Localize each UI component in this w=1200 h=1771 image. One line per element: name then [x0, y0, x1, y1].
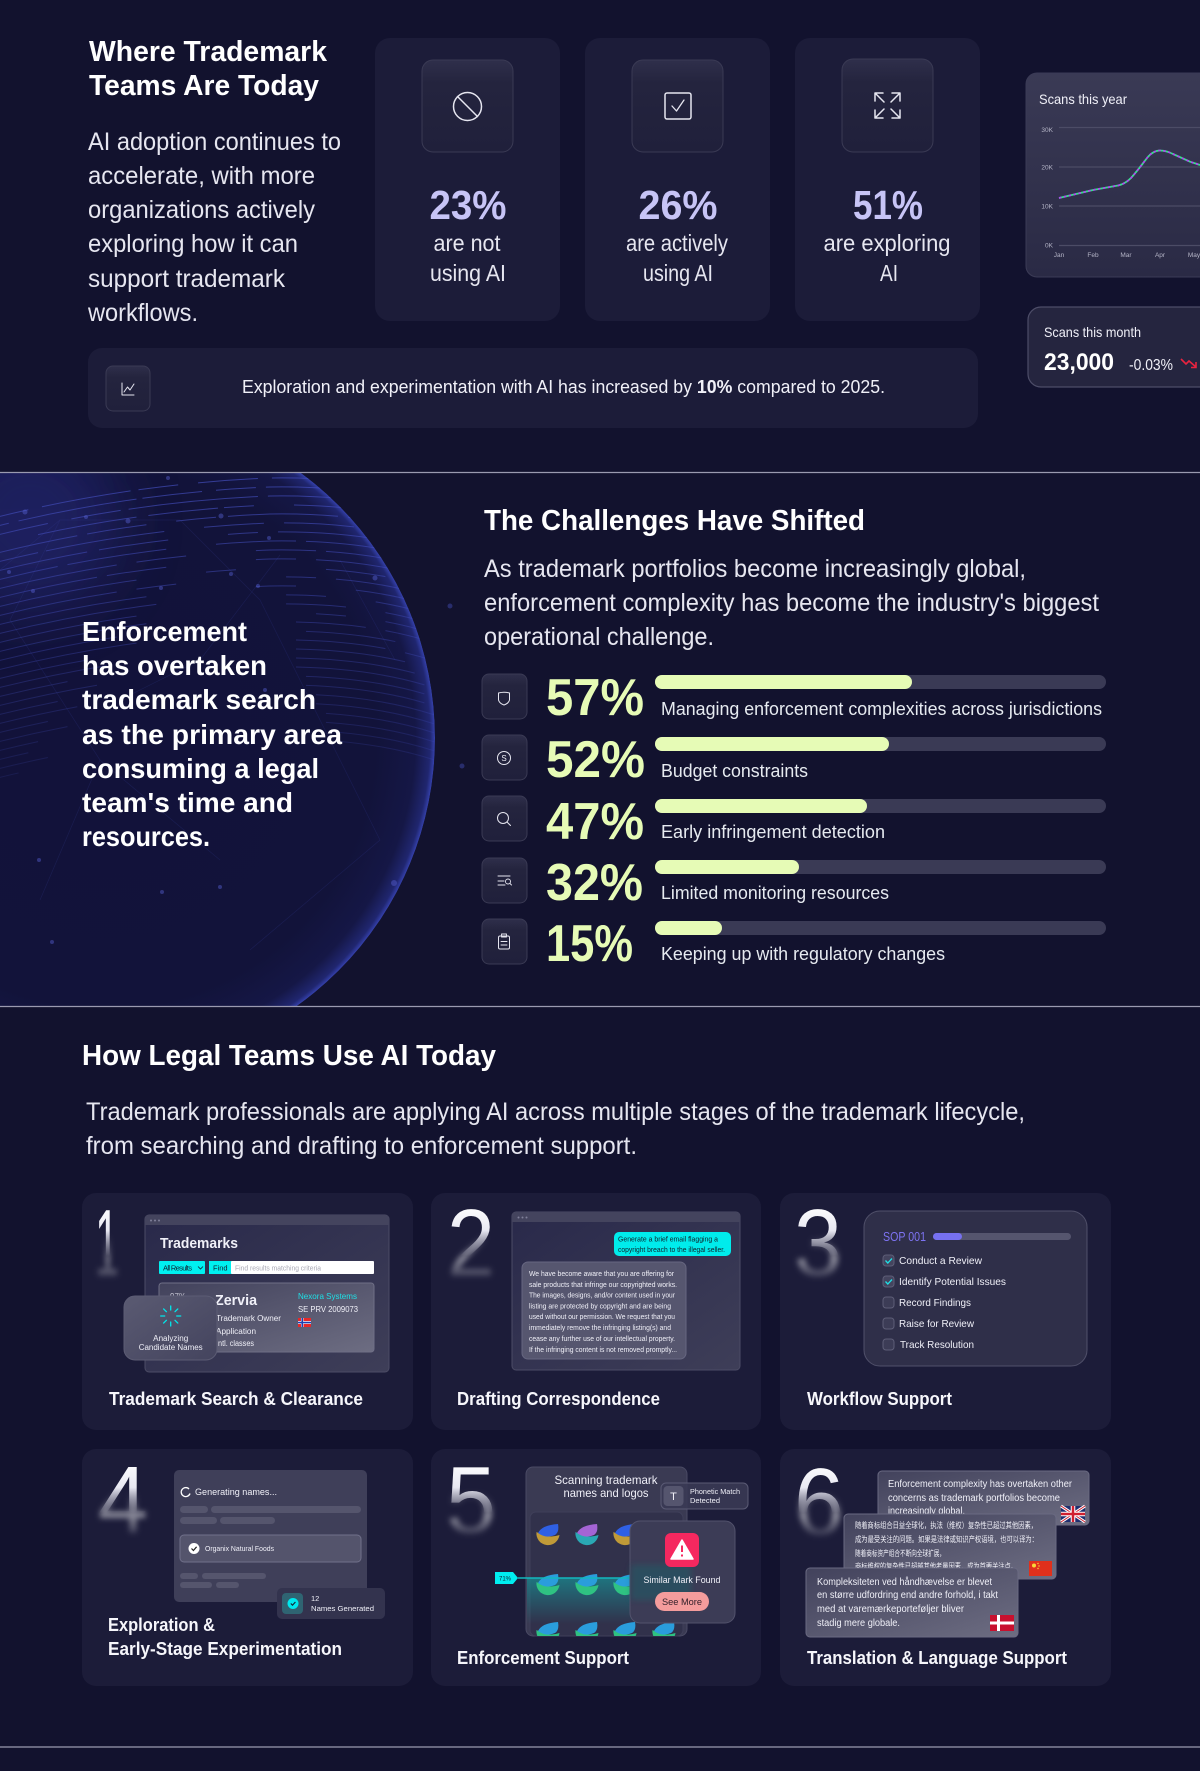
- reply bubble: [522, 1262, 686, 1359]
- card 1: trademark search and clearance: 1: [95, 1190, 119, 1297]
- stat card: 26 percent actively using AI: are actively: [626, 230, 728, 256]
- search window mockup: Trademark Owner: [216, 1314, 281, 1323]
- card 3: workflow support: [780, 1190, 1111, 1430]
- flag: china: [1029, 1561, 1052, 1576]
- reply bubble: We have become aware that you are offering for: [529, 1271, 675, 1278]
- english text box: [878, 1471, 1089, 1525]
- line chart card: scans this year: [1026, 73, 1200, 277]
- chart axis and gridlines: Feb: [1087, 252, 1099, 259]
- selected name row: Organix Natural Foods: [205, 1544, 274, 1553]
- row: 57 percent enforcement complexities: Managing enforcement complexities across jurisdictions: [661, 698, 1102, 719]
- search window mockup: Find results matching criteria: [235, 1266, 321, 1272]
- chart axis and gridlines: 10K: [1041, 204, 1054, 210]
- badge: phonetic match detected: T: [670, 1491, 677, 1503]
- intro paragraph: accelerate, with more: [88, 162, 315, 190]
- chart axis and gridlines: 30K: [1041, 127, 1054, 134]
- row: 15 percent regulatory changes: 15%: [546, 915, 633, 973]
- row: 52 percent budget constraints: [482, 731, 1106, 789]
- badge: phonetic match detected: [661, 1483, 748, 1509]
- numeral 1: [95, 1190, 119, 1297]
- section paragraph: [86, 1098, 1025, 1160]
- prompt bubble: copyright breach to the illegal seller.: [618, 1247, 725, 1254]
- chinese text box: [844, 1514, 1056, 1579]
- card 2: drafting correspondence: Drafting Correspondence: [457, 1388, 660, 1409]
- danish text box: Kompleksiteten ved håndhævelse er blevet: [817, 1576, 992, 1588]
- row: 32 percent limited monitoring resources: Limited monitoring resources: [661, 882, 889, 903]
- stat card: 23 percent not using AI: are not: [434, 230, 501, 256]
- section: where trademark teams are today: [87, 36, 1200, 428]
- search window mockup: Nexora Systems: [298, 1291, 357, 1301]
- checklist item: Record Findings: [899, 1297, 971, 1309]
- intro paragraph: workflows.: [87, 299, 198, 327]
- chart axis and gridlines: May: [1188, 252, 1200, 259]
- numeral 6: 6: [794, 1449, 844, 1556]
- challenges paragraph: operational challenge.: [484, 623, 714, 651]
- icon: dollar coin: [482, 735, 527, 780]
- icon: not allowed: [422, 60, 513, 152]
- callout text: enforcement has overtaken search: Enforcement: [82, 616, 247, 647]
- numeral 6: 6: [794, 1449, 844, 1556]
- section: challenges: [0, 473, 1106, 1006]
- search window mockup: All Results: [163, 1264, 192, 1272]
- icon: shield: [482, 674, 527, 719]
- chart axis and gridlines: [1041, 127, 1200, 259]
- icon: clipboard: [482, 919, 527, 964]
- progress bar 47: [655, 799, 1106, 813]
- callout text: enforcement has overtaken search: as the primary area: [82, 719, 342, 750]
- card 2: drafting correspondence: [431, 1190, 761, 1430]
- row: 52 percent budget constraints: Budget constraints: [661, 760, 808, 781]
- intro paragraph: AI adoption continues to: [88, 128, 341, 156]
- progress bar 15: [655, 921, 1106, 935]
- chart axis and gridlines: 20K: [1041, 164, 1054, 172]
- generating names panel: [174, 1470, 367, 1602]
- card 5: enforcement support: Enforcement Support: [457, 1647, 629, 1668]
- stat card: 23 percent not using AI: 23%: [430, 182, 506, 228]
- chinese text box: 随着商标资产组合不断向全球扩展，: [855, 1548, 945, 1558]
- numeral 3: 3: [794, 1190, 842, 1297]
- chart axis and gridlines: 0K: [1045, 242, 1054, 250]
- checklist item: Track Resolution: [900, 1339, 974, 1351]
- stat card: 51 percent exploring AI: 51%: [853, 182, 923, 228]
- icon: list search: [482, 858, 527, 903]
- card 4: exploration and early-stage experimentation: [82, 1447, 413, 1686]
- stat card: 26 percent actively using AI: using AI: [643, 260, 713, 286]
- badge: 12 names generated: [277, 1588, 385, 1619]
- logo scanning panel: [526, 1467, 687, 1643]
- icon: line chart: [106, 366, 150, 411]
- alert card: similar mark found: Similar Mark Found: [644, 1575, 720, 1586]
- reply bubble: used without our permission. We request that you: [529, 1314, 675, 1321]
- reply bubble: listing are protected by copyright and are being: [529, 1304, 671, 1310]
- heading: where trademark teams are today: Where Trademark: [89, 36, 328, 68]
- row: 57 percent enforcement complexities: [482, 669, 1106, 727]
- card 6: translation and language support: [780, 1449, 1111, 1686]
- callout text: enforcement has overtaken search: resources.: [82, 821, 210, 852]
- chinese text box: 随着商标组合日益全球化，执法（维权）复杂性已超过其他因素，: [855, 1520, 1037, 1530]
- numeral 4: 4: [98, 1447, 148, 1554]
- flag: norway: [298, 1318, 311, 1327]
- stat card: scans this month: -0.03%: [1129, 357, 1173, 374]
- SOP checklist panel: SOP 001: [883, 1230, 926, 1244]
- icon: magnifier: [482, 796, 527, 841]
- stat card: 51 percent exploring AI: are exploring: [824, 230, 950, 256]
- icon: red down arrow: [1181, 359, 1196, 368]
- overlay: analyzing candidate names: Analyzing: [153, 1334, 188, 1343]
- logo scanning panel: Scanning trademark: [554, 1473, 658, 1487]
- callout bar: exploration increased: Exploration and experimentation with AI has increased by 10% compared to 2025.: [242, 376, 885, 397]
- heading: where trademark teams are today: Teams Are Today: [89, 70, 319, 102]
- callout bar: exploration increased: [88, 348, 978, 428]
- chart axis and gridlines: Apr: [1155, 252, 1166, 259]
- scan marker: 71 percent: [495, 1572, 632, 1584]
- search window mockup: Zervia: [215, 1292, 258, 1309]
- challenges paragraph: enforcement complexity has become the industry's biggest: [484, 589, 1099, 617]
- badge: 12 names generated: Names Generated: [311, 1604, 374, 1613]
- stat card: 51 percent exploring AI: AI: [880, 260, 898, 286]
- row: 47 percent early infringement detection: Early infringement detection: [661, 821, 885, 842]
- callout text: enforcement has overtaken search: [82, 616, 342, 852]
- callout text: enforcement has overtaken search: team's time and: [82, 787, 293, 818]
- row: 15 percent regulatory changes: [482, 915, 1106, 973]
- search window mockup: Find: [213, 1264, 228, 1272]
- stat card: scans this month: 23,000: [1044, 349, 1114, 376]
- alert card: similar mark found: [630, 1521, 735, 1623]
- reply bubble: The images, designs, and/or content used in your: [529, 1292, 676, 1300]
- reply bubble: sale products that infringe our copyrighted works.: [529, 1282, 677, 1289]
- search window mockup: Trademarks: [160, 1235, 238, 1252]
- globe floating dots: [448, 604, 464, 768]
- checklist item: Conduct a Review: [899, 1255, 982, 1267]
- english text box: concerns as trademark portfolios become: [888, 1493, 1060, 1504]
- intro paragraph: support trademark: [88, 265, 285, 293]
- chinese text box: 成为最受关注的问题。如果是法律或知识产权语境，也可以译为：: [855, 1534, 1038, 1544]
- challenges paragraph: As trademark portfolios become increasingly global,: [484, 555, 1026, 583]
- card 1: trademark search and clearance: 1: [95, 1190, 119, 1297]
- search window mockup: SE PRV 2009073: [298, 1304, 358, 1314]
- see more button: See More: [662, 1597, 702, 1608]
- globe illustration: [0, 473, 435, 1006]
- checklist item: Identify Potential Issues: [899, 1276, 1006, 1288]
- logo grid: [536, 1524, 676, 1643]
- progress bar 57: [655, 675, 1106, 689]
- callout text: enforcement has overtaken search: trademark search: [82, 684, 316, 715]
- prompt bubble: [614, 1232, 731, 1256]
- badge: phonetic match detected: Phonetic Match: [690, 1489, 740, 1496]
- line chart card: scans this year: Scans this year: [1039, 91, 1127, 107]
- overlay: analyzing candidate names: [124, 1296, 217, 1360]
- stat card: 23 percent not using AI: [375, 38, 560, 321]
- row: 57 percent enforcement complexities: 57%: [546, 669, 644, 727]
- row: 52 percent budget constraints: 52%: [546, 731, 645, 789]
- checklist item: Raise for Review: [899, 1318, 974, 1330]
- SOP progress bar: [933, 1233, 1071, 1240]
- challenges paragraph: [484, 555, 1099, 651]
- icon: expand arrows: [842, 59, 933, 152]
- card 1: trademark search and clearance: [82, 1190, 413, 1430]
- callout text: enforcement has overtaken search: consuming a legal: [82, 753, 319, 784]
- stat card: 26 percent actively using AI: [585, 38, 770, 321]
- numeral 5: 5: [446, 1447, 496, 1554]
- stat card: scans this month: [1028, 307, 1200, 387]
- danish text box: stadig mere globale.: [817, 1618, 900, 1629]
- row: 47 percent early infringement detection: [482, 793, 1106, 851]
- callout text: enforcement has overtaken search: has overtaken: [82, 650, 267, 681]
- numeral 3: 3: [794, 1190, 842, 1297]
- card 4: exploration and early-stage experimentation: Early-Stage Experimentation: [108, 1638, 342, 1659]
- section paragraph: Trademark professionals are applying AI across multiple stages of the trademark lifecycle,: [86, 1098, 1025, 1126]
- section paragraph: from searching and drafting to enforcement support.: [86, 1132, 637, 1160]
- icon: warning: [665, 1533, 699, 1567]
- overlay: analyzing candidate names: Candidate Names: [139, 1343, 203, 1352]
- row: 15 percent regulatory changes: Keeping up with regulatory changes: [661, 943, 945, 964]
- danish text box: [806, 1568, 1018, 1637]
- logo scanning panel: names and logos: [564, 1486, 648, 1500]
- stat card: 51 percent exploring AI: [795, 38, 980, 321]
- badge: 12 names generated: 12: [311, 1594, 319, 1603]
- scan glow: [527, 1578, 683, 1624]
- heading: how legal teams use AI today: How Legal Teams Use AI Today: [82, 1040, 496, 1072]
- flag: denmark: [990, 1615, 1014, 1631]
- search window mockup: Application: [216, 1327, 256, 1336]
- danish text box: en større udfordring end andre forhold, i takt: [817, 1590, 998, 1601]
- card 6: translation and language support: Translation & Language Support: [807, 1647, 1067, 1668]
- badge: phonetic match detected: Detected: [690, 1498, 720, 1505]
- numeral 2: 2: [447, 1190, 495, 1297]
- heading: the challenges have shifted: The Challenges Have Shifted: [484, 505, 865, 537]
- intro paragraph: exploring how it can: [88, 230, 298, 258]
- stat card: 23 percent not using AI: using AI: [430, 260, 506, 286]
- selected name row: [180, 1535, 361, 1562]
- card 1: trademark search and clearance: Trademark Search & Clearance: [109, 1388, 363, 1409]
- icon: dollar coin: S: [501, 754, 507, 763]
- card 3: workflow support: Workflow Support: [807, 1388, 952, 1409]
- flag: united kingdom: [1061, 1506, 1085, 1522]
- icon: checkbox: [632, 60, 723, 152]
- row: 47 percent early infringement detection: 47%: [546, 793, 644, 851]
- row: 32 percent limited monitoring resources: [482, 854, 1106, 912]
- heading: where trademark teams are today: [89, 36, 328, 102]
- section: how legal teams use AI: [82, 1040, 1111, 1686]
- stat card: 26 percent actively using AI: 26%: [638, 182, 718, 228]
- row: 32 percent limited monitoring resources: 32%: [546, 854, 643, 912]
- danish text box: med at varemærkeporteføljer bliver: [817, 1604, 965, 1615]
- intro paragraph: [87, 128, 341, 327]
- progress bar 32: [655, 860, 1106, 874]
- reply bubble: cease any further use of our intellectual property.: [529, 1336, 675, 1343]
- search window mockup: Intl. classes: [216, 1339, 254, 1348]
- search window mockup: [145, 1215, 389, 1372]
- chat window mockup: [512, 1212, 740, 1370]
- chart line: [1059, 150, 1200, 198]
- reply bubble: immediately remove the infringing listing(s) and: [529, 1325, 671, 1332]
- card 4: exploration and early-stage experimentation: Exploration &: [108, 1614, 215, 1635]
- english text box: Enforcement complexity has overtaken other: [888, 1479, 1073, 1490]
- card 5: enforcement support: [431, 1447, 761, 1686]
- SOP checklist panel: [864, 1211, 1087, 1366]
- scan marker: 71 percent: 71%: [499, 1576, 512, 1582]
- prompt bubble: Generate a brief email flagging a: [618, 1236, 718, 1244]
- progress bar 52: [655, 737, 1106, 751]
- chart axis and gridlines: Jan: [1054, 252, 1065, 259]
- numeral 4: 4: [98, 1447, 148, 1554]
- stat card: scans this month: Scans this month: [1044, 324, 1141, 340]
- numeral 2: 2: [447, 1190, 495, 1297]
- name placeholders: [180, 1506, 361, 1588]
- search window mockup: 97%: [170, 1292, 186, 1301]
- chinese text box: 商标维权的复杂性已超越其他考量因素，成为首要关注点。: [855, 1561, 1017, 1571]
- numeral 5: 5: [446, 1447, 496, 1554]
- reply bubble: If the infringing content is not removed promptly...: [529, 1347, 677, 1354]
- english text box: increasingly global.: [888, 1506, 965, 1517]
- intro paragraph: organizations actively: [88, 196, 315, 224]
- chart axis and gridlines: Mar: [1120, 252, 1132, 259]
- generating names panel: Generating names...: [195, 1487, 277, 1498]
